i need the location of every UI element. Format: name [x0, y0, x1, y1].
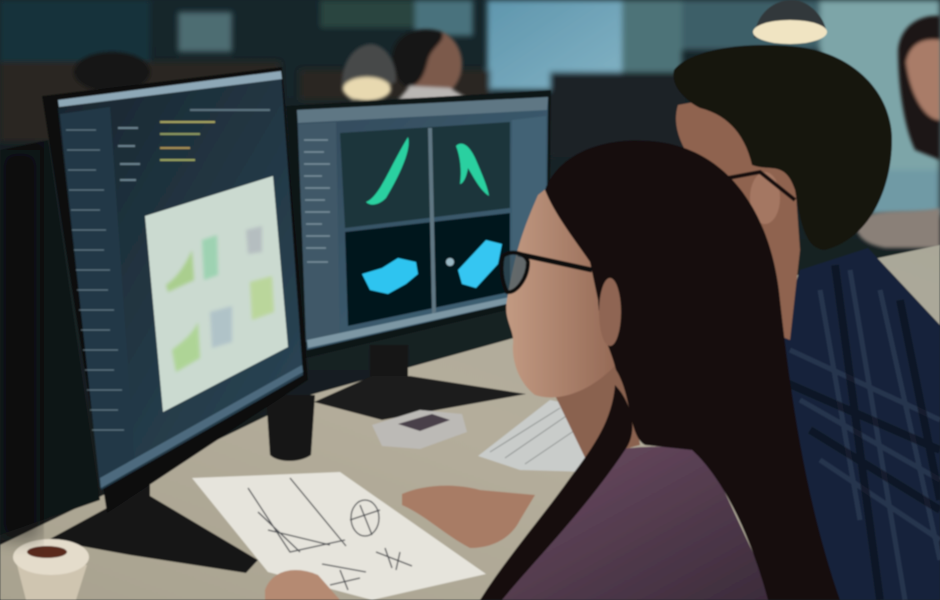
man's glasses: [728, 172, 795, 200]
woman's glasses: [502, 253, 592, 292]
man's shirt: [775, 248, 940, 600]
blue model left: [362, 258, 418, 294]
paper with sketches: [192, 472, 486, 600]
hanging lamp: [753, 0, 827, 44]
monitor 1 stand: [48, 480, 258, 573]
woman's face: [506, 170, 640, 397]
woman's hair: [545, 140, 840, 600]
monitor 2 bottom bar: [307, 297, 510, 348]
vignette shadow at left: [0, 150, 40, 540]
green model left: [366, 137, 409, 205]
man in plaid shirt: [673, 45, 940, 600]
desk lamp in background: [342, 44, 396, 102]
man's ear: [750, 172, 780, 224]
monitor 1: [42, 67, 308, 513]
woman: [480, 140, 840, 600]
woman's front hair strand: [480, 385, 632, 600]
pen holder: [266, 395, 315, 461]
monitor 1 toolbar: [58, 71, 282, 107]
monitor 1 document panel: [145, 176, 288, 412]
monitor 2 toolbar: [297, 97, 548, 123]
monitor 2: [286, 90, 551, 358]
document charts: [166, 226, 274, 372]
desk surface: [0, 245, 940, 600]
woman's ear: [599, 278, 621, 346]
monitor 1 code lines: [118, 110, 270, 180]
coffee cup: [13, 539, 89, 600]
other hand at bottom: [265, 570, 340, 600]
man's hair: [673, 45, 892, 250]
left partition: [0, 140, 100, 535]
background woman at right: [855, 16, 940, 248]
monitor 1 file tree: [60, 107, 135, 488]
monitor 2 sidebar: [298, 122, 340, 342]
woman's shirt: [498, 447, 775, 600]
background colleague at centre: [392, 29, 470, 100]
woman's neck: [550, 350, 640, 468]
green model right: [456, 144, 489, 196]
keyboard: [478, 400, 600, 472]
background colleague at left: [74, 52, 150, 92]
blue model right: [458, 240, 502, 288]
monitor 2 stand: [314, 345, 526, 420]
man's neck and face: [676, 90, 800, 340]
calculator: [372, 410, 467, 449]
monitor 1 bottom bar: [100, 365, 303, 488]
viewport right panel: [512, 116, 546, 294]
woman's hand on paper: [402, 486, 535, 548]
viewport grid: [340, 122, 510, 228]
